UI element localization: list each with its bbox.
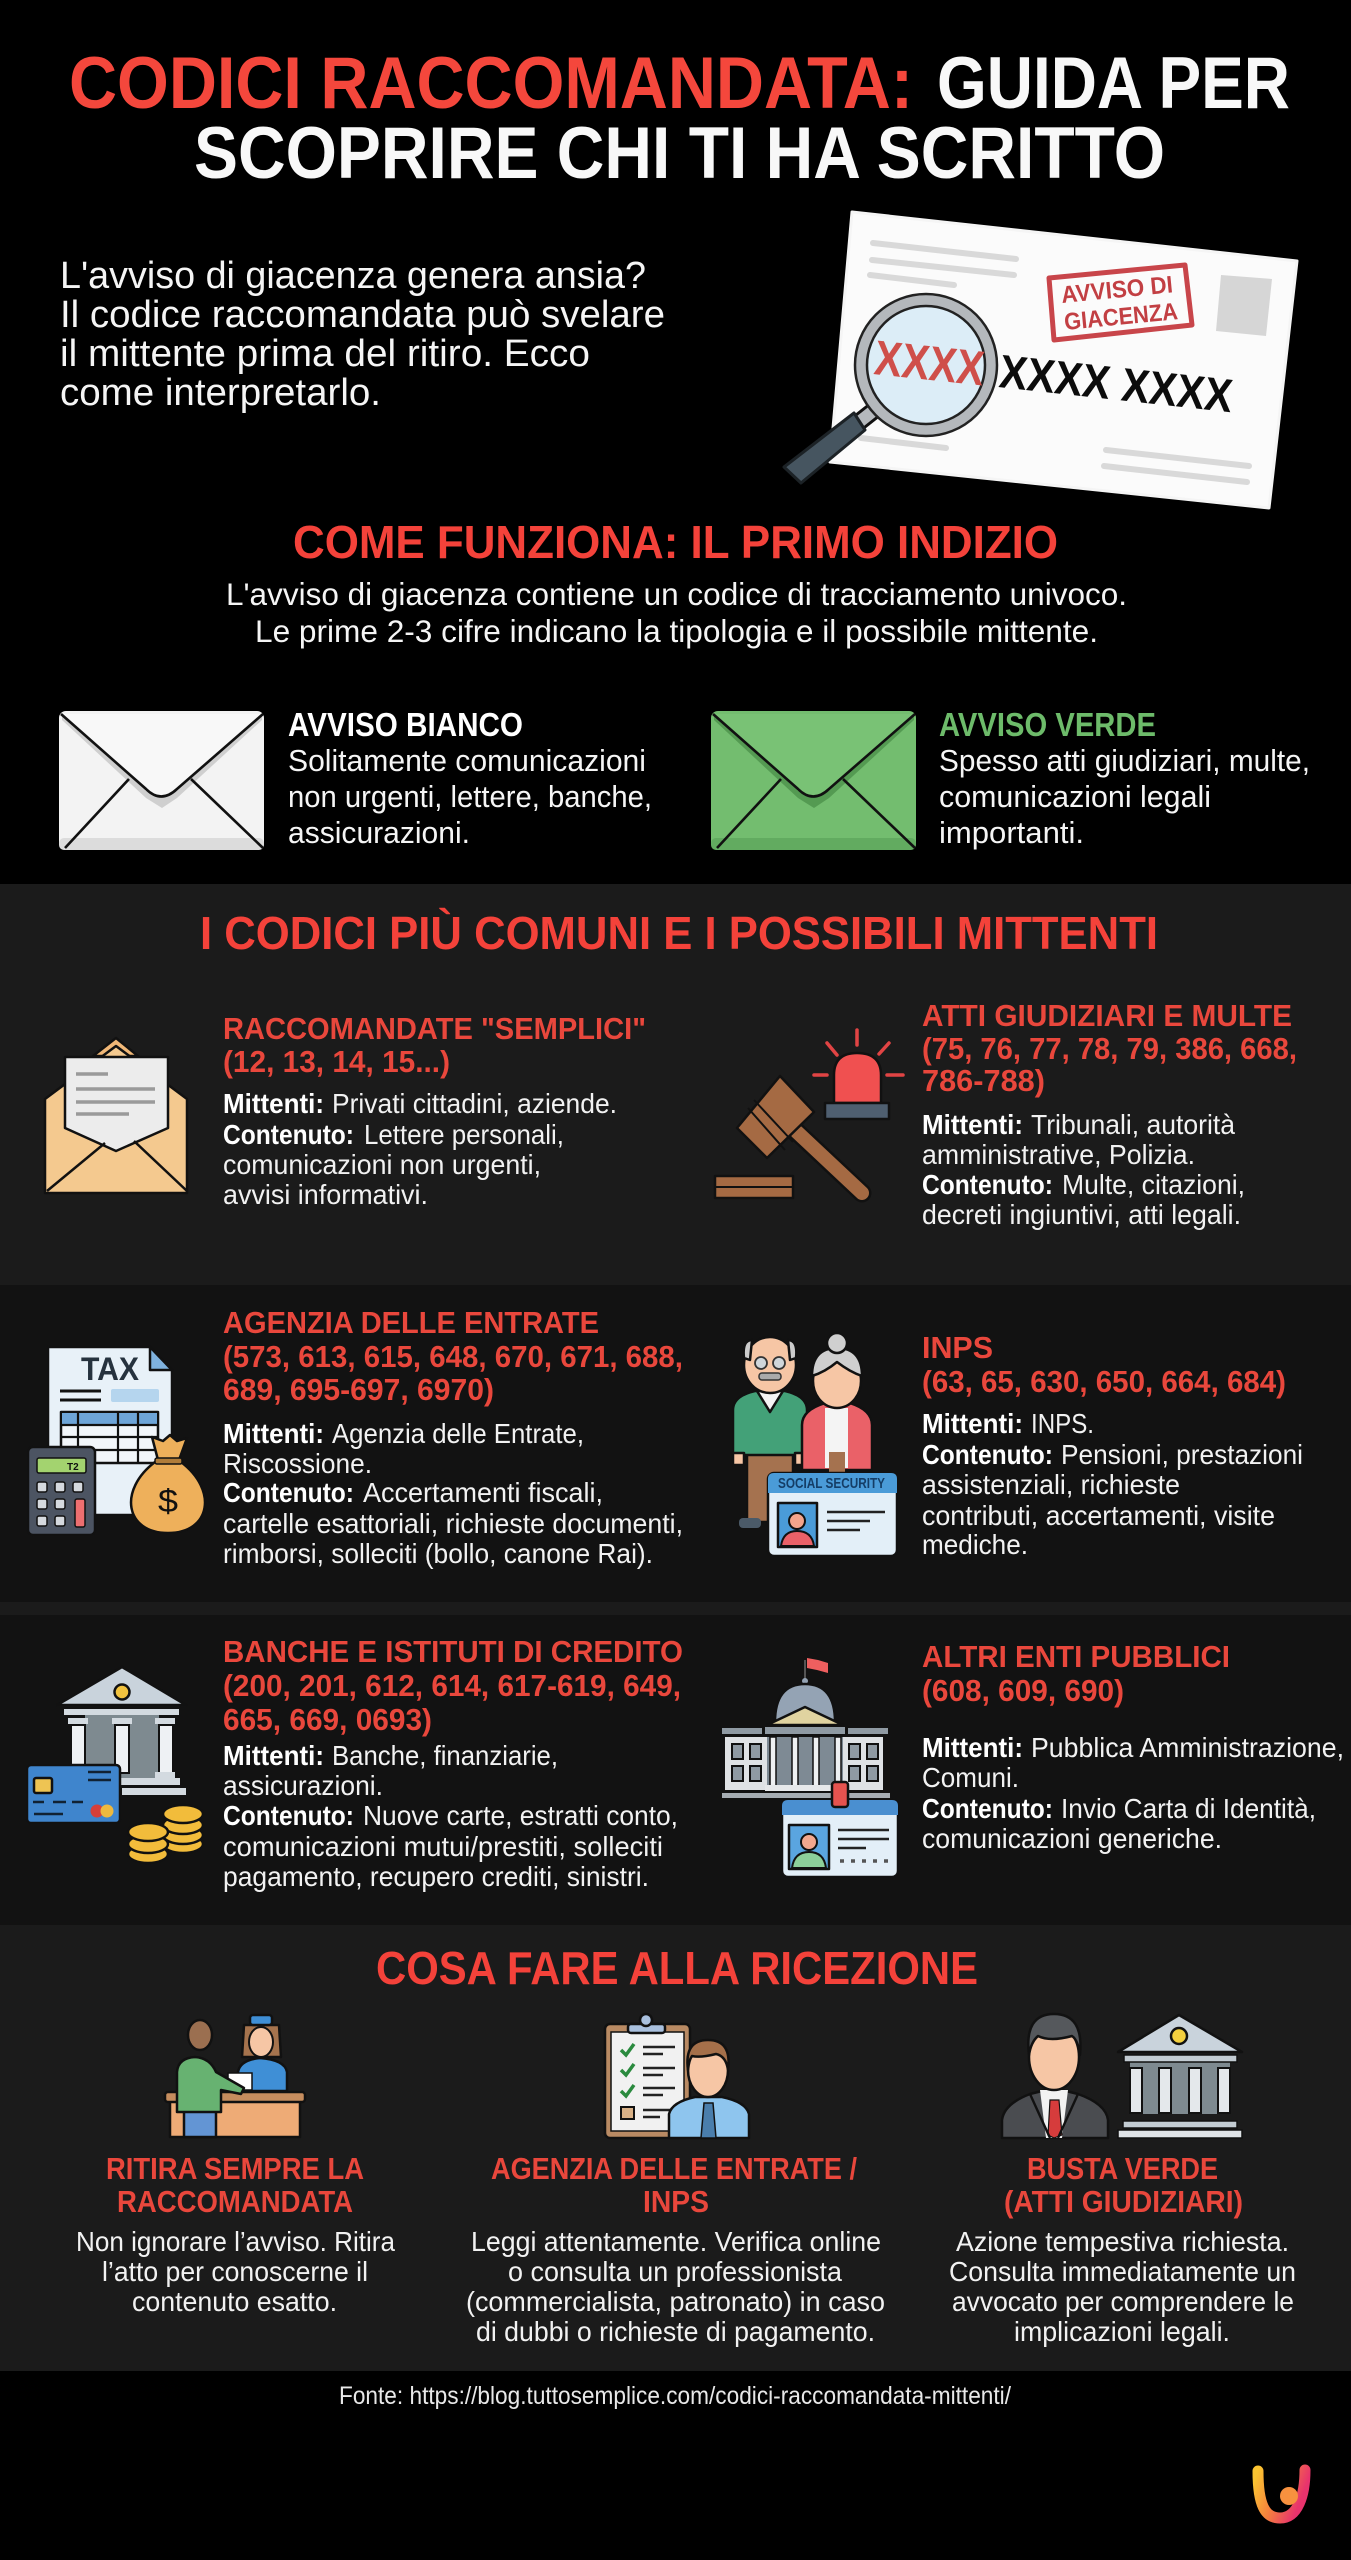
block: altri enti pubblici: (608, 609, 690) <box>922 1674 1124 1708</box>
paragraph: come funziona <box>226 576 1127 649</box>
block: banche e istituti di credito: Banche, finanziarie, <box>332 1740 558 1771</box>
intro text: il mittente prima del ritiro. Ecco <box>60 333 590 375</box>
block: raccomandate semplici: comunicazioni non urgenti, <box>223 1149 541 1180</box>
block: agenzia delle entrate: 689, 695-697, 6970) <box>223 1373 494 1407</box>
icon: post office counter <box>165 2015 305 2137</box>
block: ritira sempre: RACCOMANDATA <box>117 2185 353 2219</box>
block: raccomandate semplici: Privati cittadini, aziende. <box>332 1088 617 1119</box>
block: agenzia delle entrate: AGENZIA DELLE ENTRATE <box>223 1306 599 1340</box>
logo <box>1258 2470 1305 2518</box>
text: avviso bianco: Solitamente comunicazioni <box>288 744 646 778</box>
block: atti giudiziari e multe: decreti ingiuntivi, atti legali. <box>922 1199 1241 1230</box>
block: inps: (63, 65, 630, 650, 664, 684) <box>922 1365 1286 1399</box>
block: busta verde: BUSTA VERDE <box>1027 2152 1218 2186</box>
block: ritira sempre <box>76 2152 395 2317</box>
block: agenzia delle entrate <box>223 1306 683 1569</box>
icon: gavel and siren <box>715 1030 903 1198</box>
block: agenzia delle entrate: (573, 613, 615, 648, 670, 671, 688, <box>223 1340 683 1374</box>
intro text: L'avviso di giacenza genera ansia? <box>60 255 646 297</box>
title: SCOPRIRE CHI TI HA SCRITTO <box>194 113 1165 194</box>
intro text: Il codice raccomandata può svelare <box>60 294 665 336</box>
block: atti giudiziari e multe: (75, 76, 77, 78, 79, 386, 668, <box>922 1032 1297 1066</box>
block: ritira sempre: l’atto per conoscerne il <box>102 2256 368 2287</box>
block: banche e istituti di credito: Mittenti: <box>223 1740 324 1771</box>
heading: cosa fare alla ricezione: COSA FARE ALLA RICEZIONE <box>376 1942 978 1994</box>
block: agenzia delle entrate: Contenuto: <box>223 1477 354 1508</box>
block: agenzia delle entrate: Accertamenti fiscali, <box>363 1477 603 1508</box>
block: agenzia delle entrate / inps: Leggi attentamente. Verifica online <box>471 2226 881 2257</box>
block: busta verde <box>949 2152 1296 2347</box>
block: altri enti pubblici: Contenuto: <box>922 1793 1053 1824</box>
text: avviso verde: comunicazioni legali <box>939 780 1211 814</box>
block: raccomandate semplici: (12, 13, 14, 15...) <box>223 1045 450 1079</box>
block: altri enti pubblici: Pubblica Amministrazione, <box>1031 1732 1344 1763</box>
block: raccomandate semplici: Contenuto: <box>223 1119 354 1150</box>
block: raccomandate semplici: Mittenti: <box>223 1088 324 1119</box>
illustration: notice card with magnifier: XXXX XXXX <box>997 344 1235 422</box>
block: atti giudiziari e multe: Mittenti: <box>922 1109 1023 1140</box>
paragraph: come funziona: L'avviso di giacenza contiene un codice di tracciamento univoco. <box>226 576 1127 612</box>
block: inps: contributi, accertamenti, visite <box>922 1500 1275 1531</box>
block: altri enti pubblici: ALTRI ENTI PUBBLICI <box>922 1640 1230 1674</box>
icon: open envelope with letter <box>45 1038 187 1193</box>
text: avviso verde: importanti. <box>939 816 1084 850</box>
icon: tax document, calculator, money bag: T2 <box>67 1462 79 1473</box>
block: busta verde: Consulta immediatamente un <box>949 2256 1296 2287</box>
heading: i codici più comuni: I CODICI PIÙ COMUNI E I POSSIBILI MITTENTI <box>200 907 1158 959</box>
icon: pensioners and social security card: SOCIAL SECURITY <box>778 1475 885 1492</box>
block: atti giudiziari e multe: amministrative, Polizia. <box>922 1139 1195 1170</box>
block: altri enti pubblici: Mittenti: <box>922 1732 1023 1763</box>
block: agenzia delle entrate / inps: (commercialista, patronato) in caso <box>466 2286 885 2317</box>
block: atti giudiziari e multe <box>922 999 1297 1230</box>
block: inps: INPS. <box>1031 1408 1094 1439</box>
block: inps: INPS <box>922 1331 993 1365</box>
paragraph: come funziona: Le prime 2-3 cifre indicano la tipologia e il possibile mittente. <box>255 613 1098 649</box>
icon: government building and id card <box>722 1658 898 1877</box>
block: atti giudiziari e multe: Contenuto: <box>922 1169 1053 1200</box>
title: CODICI RACCOMANDATA: <box>69 43 913 124</box>
block: banche e istituti di credito: (200, 201, 612, 614, 617-619, 649, <box>223 1669 681 1703</box>
icon: clipboard and consultant <box>605 2014 749 2138</box>
icon: tax document, calculator, money bag <box>28 1347 205 1535</box>
block: altri enti pubblici: comunicazioni generiche. <box>922 1823 1222 1854</box>
block: atti giudiziari e multe: 786-788) <box>922 1064 1045 1098</box>
block: raccomandate semplici: Lettere personali, <box>364 1119 564 1150</box>
icon: tax document, calculator, money bag: $ <box>158 1483 178 1519</box>
block: inps: Contenuto: <box>922 1439 1053 1470</box>
block: banche e istituti di credito <box>223 1635 683 1892</box>
block: agenzia delle entrate / inps: di dubbi o richieste di pagamento. <box>476 2316 875 2347</box>
text: avviso bianco: AVVISO BIANCO <box>288 706 523 743</box>
heading: come funziona: COME FUNZIONA: IL PRIMO INDIZIO <box>293 516 1058 568</box>
block: agenzia delle entrate / inps: o consulta un professionista <box>508 2256 842 2287</box>
illustration: notice card with magnifier <box>784 212 1297 508</box>
block: banche e istituti di credito: pagamento, recupero crediti, sinistri. <box>223 1861 649 1892</box>
block: altri enti pubblici <box>922 1640 1344 1854</box>
block: banche e istituti di credito: BANCHE E ISTITUTI DI CREDITO <box>223 1635 683 1669</box>
block: atti giudiziari e multe: ATTI GIUDIZIARI E MULTE <box>922 999 1292 1033</box>
block: banche e istituti di credito: assicurazioni. <box>223 1770 383 1801</box>
text: avviso verde: Spesso atti giudiziari, multe, <box>939 744 1310 778</box>
block: inps: assistenziali, richieste <box>922 1469 1180 1500</box>
block: altri enti pubblici: Comuni. <box>922 1762 1019 1793</box>
block: ritira sempre: RITIRA SEMPRE LA <box>106 2152 364 2186</box>
block: agenzia delle entrate: Mittenti: <box>223 1418 324 1449</box>
block: raccomandate semplici <box>223 1012 646 1210</box>
block: agenzia delle entrate / inps: INPS <box>643 2185 709 2219</box>
block: banche e istituti di credito: comunicazioni mutui/prestiti, solleciti <box>223 1831 663 1862</box>
icon: pensioners and social security card <box>733 1333 897 1556</box>
icon: lawyer and courthouse <box>1002 2014 1242 2138</box>
block: agenzia delle entrate: Riscossione. <box>223 1448 372 1479</box>
block: busta verde: implicazioni legali. <box>1014 2316 1230 2347</box>
block: busta verde: avvocato per comprendere le <box>952 2286 1294 2317</box>
icon: white envelope <box>59 711 264 850</box>
illustration: notice card with magnifier: XXXX <box>872 331 987 396</box>
block: altri enti pubblici: Invio Carta di Identità, <box>1061 1793 1316 1824</box>
icon: tax document, calculator, money bag: TAX <box>81 1351 140 1387</box>
illustration: notice card with magnifier: GIACENZA <box>1063 298 1179 336</box>
block: agenzia delle entrate: rimborsi, solleciti (bollo, canone Rai). <box>223 1538 653 1569</box>
icon: bank, credit card and coins <box>27 1667 203 1863</box>
block: agenzia delle entrate / inps: AGENZIA DELLE ENTRATE / <box>491 2152 857 2186</box>
text: avviso bianco: assicurazioni. <box>288 816 470 850</box>
title <box>69 43 1290 194</box>
block: atti giudiziari e multe: Multe, citazioni, <box>1062 1169 1245 1200</box>
block: inps: Pensioni, prestazioni <box>1061 1439 1303 1470</box>
block: ritira sempre: contenuto esatto. <box>132 2286 337 2317</box>
text: avviso bianco: non urgenti, lettere, banche, <box>288 780 652 814</box>
source line: Fonte: https://blog.tuttosemplice.com/codici-raccomandata-mittenti/ <box>339 2382 1011 2410</box>
block: ritira sempre: Non ignorare l’avviso. Ritira <box>76 2226 395 2257</box>
block: agenzia delle entrate: cartelle esattoriali, richieste documenti, <box>223 1508 683 1539</box>
block: agenzia delle entrate / inps <box>466 2152 885 2347</box>
text: avviso bianco <box>288 706 652 850</box>
block: busta verde: Azione tempestiva richiesta. <box>956 2226 1289 2257</box>
block: inps: Mittenti: <box>922 1408 1023 1439</box>
block: inps <box>922 1331 1303 1560</box>
block: raccomandate semplici: RACCOMANDATE "SEMPLICI" <box>223 1012 646 1046</box>
block: banche e istituti di credito: 665, 669, 0693) <box>223 1703 432 1737</box>
block: banche e istituti di credito: Contenuto: <box>223 1800 354 1831</box>
block: agenzia delle entrate: Agenzia delle Entrate, <box>332 1418 584 1449</box>
intro text: come interpretarlo. <box>60 372 381 414</box>
text: avviso verde <box>939 706 1310 850</box>
block: banche e istituti di credito: Nuove carte, estratti conto, <box>363 1800 678 1831</box>
block: raccomandate semplici: avvisi informativi. <box>223 1179 428 1210</box>
block: atti giudiziari e multe: Tribunali, autorità <box>1031 1109 1235 1140</box>
text: avviso verde: AVVISO VERDE <box>939 706 1156 743</box>
illustration: notice card with magnifier: AVVISO DI <box>1060 271 1174 309</box>
intro text <box>60 255 665 414</box>
block: busta verde: (ATTI GIUDIZIARI) <box>1004 2185 1243 2219</box>
icon: green envelope <box>711 711 916 850</box>
block: inps: mediche. <box>922 1529 1028 1560</box>
title: GUIDA PER <box>937 43 1290 124</box>
